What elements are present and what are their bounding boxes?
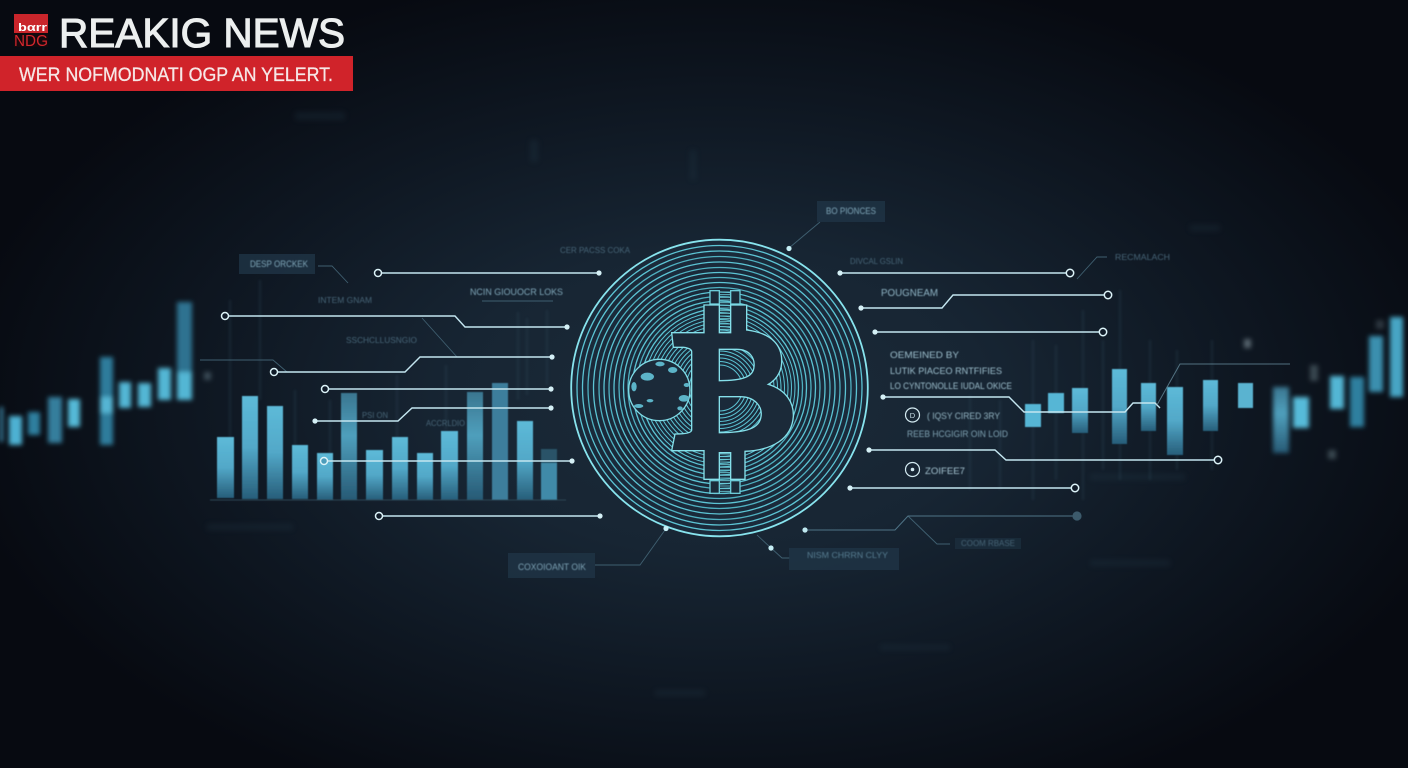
label: cer pacss coka: CER PACSS COKA (560, 246, 631, 255)
coin edge dots (663, 246, 792, 551)
text block: description: LUTIK PIACEO RNTFIFIES (890, 366, 1002, 377)
label: coom rbase (955, 538, 1021, 549)
logo: bαrr (18, 22, 48, 34)
stem hatching (710, 291, 740, 493)
logo (14, 14, 48, 50)
far right blurred candlesticks (1244, 317, 1403, 459)
label: pougneam: POUGNEAM (881, 288, 938, 299)
globe (629, 359, 690, 421)
right candlestick chart (1025, 369, 1253, 455)
background smudges (207, 112, 1220, 696)
left bar chart (210, 383, 566, 500)
faint candle wicks (230, 280, 1212, 500)
list item with icon: iqsy cired (906, 408, 1008, 439)
bitcoin symbol and globe (629, 291, 793, 493)
label: coom rbase: COOM RBASE (961, 539, 1015, 548)
label: bo pionces: BO PIONCES (826, 206, 876, 216)
bitcoin coin (570, 239, 868, 537)
label: sschcllusngio: SSCHCLLUSNGIO (346, 336, 417, 345)
label: intem gnam: INTEM GNAM (318, 296, 372, 305)
label: accrldio: ACCRLDIO (426, 419, 465, 428)
label: psi on: PSI ON (362, 411, 388, 420)
label: desp orckek: DESP ORCKEK (250, 259, 308, 269)
alert banner: WER NOFMODNATI OGP AN YELERT. (19, 64, 333, 86)
label: recmalach: RECMALACH (1115, 253, 1170, 262)
label: nism chrrn clyy (789, 548, 899, 570)
list item with icon: zoifee7: ZOIFEE7 (925, 466, 965, 477)
label: bo pionces (817, 201, 885, 222)
faint connector lines (200, 222, 1107, 565)
text block: description (890, 350, 1012, 392)
label: desp orckek (239, 254, 315, 274)
alert banner (0, 56, 353, 91)
list item with icon: zoifee7 (906, 462, 965, 477)
text block: description: OEMEINED BY (890, 350, 960, 361)
bitcoin B glyph (672, 305, 793, 479)
label: coxoioant oik: COXOIOANT OIK (518, 562, 586, 572)
coin disc (570, 239, 868, 537)
list item with icon: iqsy cired: ( IQSY CIRED 3RY (927, 411, 1001, 422)
label: divcal gslin: DIVCAL GSLIN (850, 257, 903, 266)
title: REAKIG NEWS (59, 10, 345, 56)
list item with icon: iqsy cired: REEB HCGIGIR OIN LOID (907, 429, 1008, 439)
right callout lines (802, 269, 1290, 533)
far left blurred candlesticks (0, 302, 211, 445)
label: ncin giouocr loks: NCIN GIOUOCR LOKS (470, 287, 563, 297)
label: coxoioant oik (508, 553, 595, 578)
left callout lines (222, 270, 603, 520)
text block: description: LO CYNTONOLLE IUDAL OKICE (890, 381, 1012, 392)
list item with icon: iqsy cired: D (910, 411, 916, 420)
label: nism chrrn clyy: NISM CHRRN CLYY (807, 550, 888, 560)
coin rings (571, 240, 868, 536)
logo: NDG (14, 33, 48, 50)
